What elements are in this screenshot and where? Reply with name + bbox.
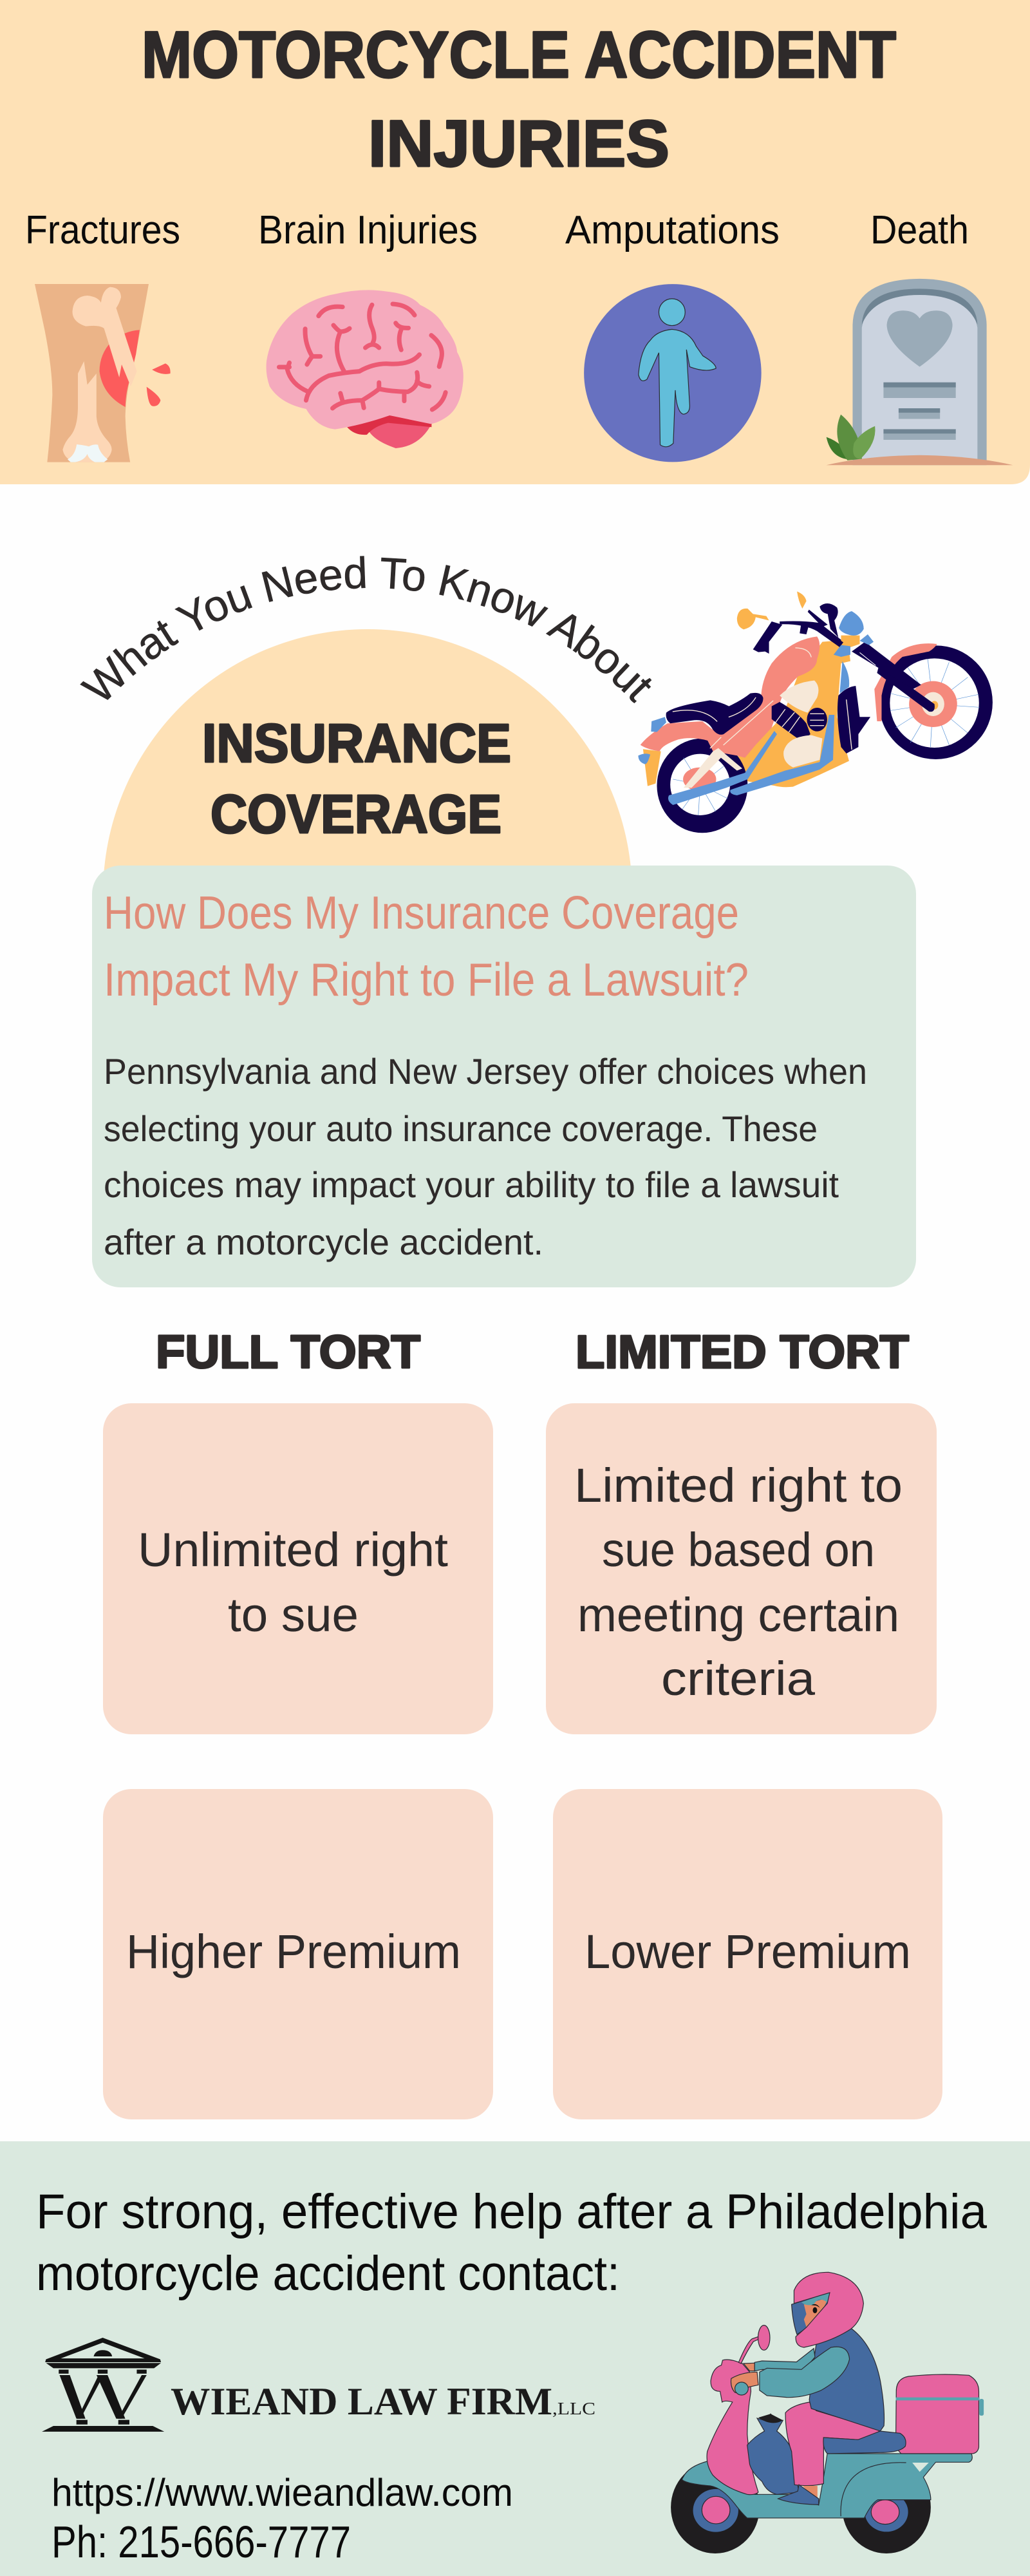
card: unlimited right to sue <box>103 1403 493 1734</box>
question heading <box>104 887 749 1006</box>
card: unlimited right to sue: Unlimited right <box>138 1523 448 1577</box>
body text: choices may impact your ability to file a lawsuit <box>104 1164 839 1205</box>
icon: amputee figure <box>584 284 762 462</box>
question heading: How Does My Insurance Coverage <box>104 887 739 939</box>
title <box>142 18 896 180</box>
body text: Pennsylvania and New Jersey offer choices when <box>104 1051 867 1092</box>
card: lower premium: Lower Premium <box>585 1925 911 1978</box>
heading: insurance coverage: INSURANCE <box>202 713 511 773</box>
body text: selecting your auto insurance coverage. These <box>104 1108 818 1149</box>
heading: insurance coverage: COVERAGE <box>211 784 501 844</box>
heading: insurance coverage <box>202 713 511 844</box>
card: limited right to sue: criteria <box>661 1652 816 1705</box>
label: Brain Injuries: Brain Injuries <box>258 208 478 252</box>
icon: scooter rider <box>671 2272 984 2553</box>
title: INJURIES <box>368 107 670 180</box>
card: limited right to sue: sue based on <box>602 1523 875 1577</box>
logo: Wieand Law Firm <box>42 2338 595 2432</box>
icon: brain <box>267 290 464 448</box>
card: lower premium <box>553 1789 942 2119</box>
card: limited right to sue: Limited right to <box>574 1459 903 1512</box>
title: MOTORCYCLE ACCIDENT <box>142 18 896 91</box>
icon: motorcycle <box>638 591 993 833</box>
website url: https://www.wieandlaw.com <box>52 2471 513 2514</box>
body text <box>104 1051 867 1262</box>
icon: temple W <box>42 2338 164 2432</box>
heading: limited tort: LIMITED TORT <box>576 1327 909 1378</box>
body text: after a motorcycle accident. <box>104 1222 543 1262</box>
panel: injuries header <box>0 0 1030 484</box>
label: Fractures: Fractures <box>25 208 180 252</box>
panel: contact footer <box>0 2141 1030 2576</box>
heading: full tort: FULL TORT <box>156 1327 420 1378</box>
panel: insurance question <box>92 866 916 1287</box>
card: higher premium: Higher Premium <box>126 1925 461 1978</box>
icon: broken bone <box>35 284 171 462</box>
curved heading: What You Need To Know About: What You Need To Know About <box>80 556 651 703</box>
icon: tombstone <box>827 279 1013 465</box>
card: limited right to sue <box>546 1403 937 1734</box>
call to action text: For strong, effective help after a Philadelphia <box>36 2184 988 2239</box>
logo: Wieand Law Firm: ,LLC <box>552 2399 595 2418</box>
label: Amputations: Amputations <box>565 208 780 252</box>
call to action text: motorcycle accident contact: <box>36 2246 620 2301</box>
call to action text <box>36 2184 988 2301</box>
logo: Wieand Law Firm: WIEAND LAW FIRM <box>171 2380 552 2423</box>
card: unlimited right to sue: to sue <box>228 1588 359 1642</box>
card: limited right to sue: meeting certain <box>577 1588 899 1642</box>
card: higher premium <box>103 1789 493 2119</box>
question heading: Impact My Right to File a Lawsuit? <box>104 954 749 1006</box>
phone number: Ph: 215-666-7777 <box>52 2517 351 2567</box>
semicircle background <box>103 629 632 1159</box>
label: Death: Death <box>870 208 969 252</box>
